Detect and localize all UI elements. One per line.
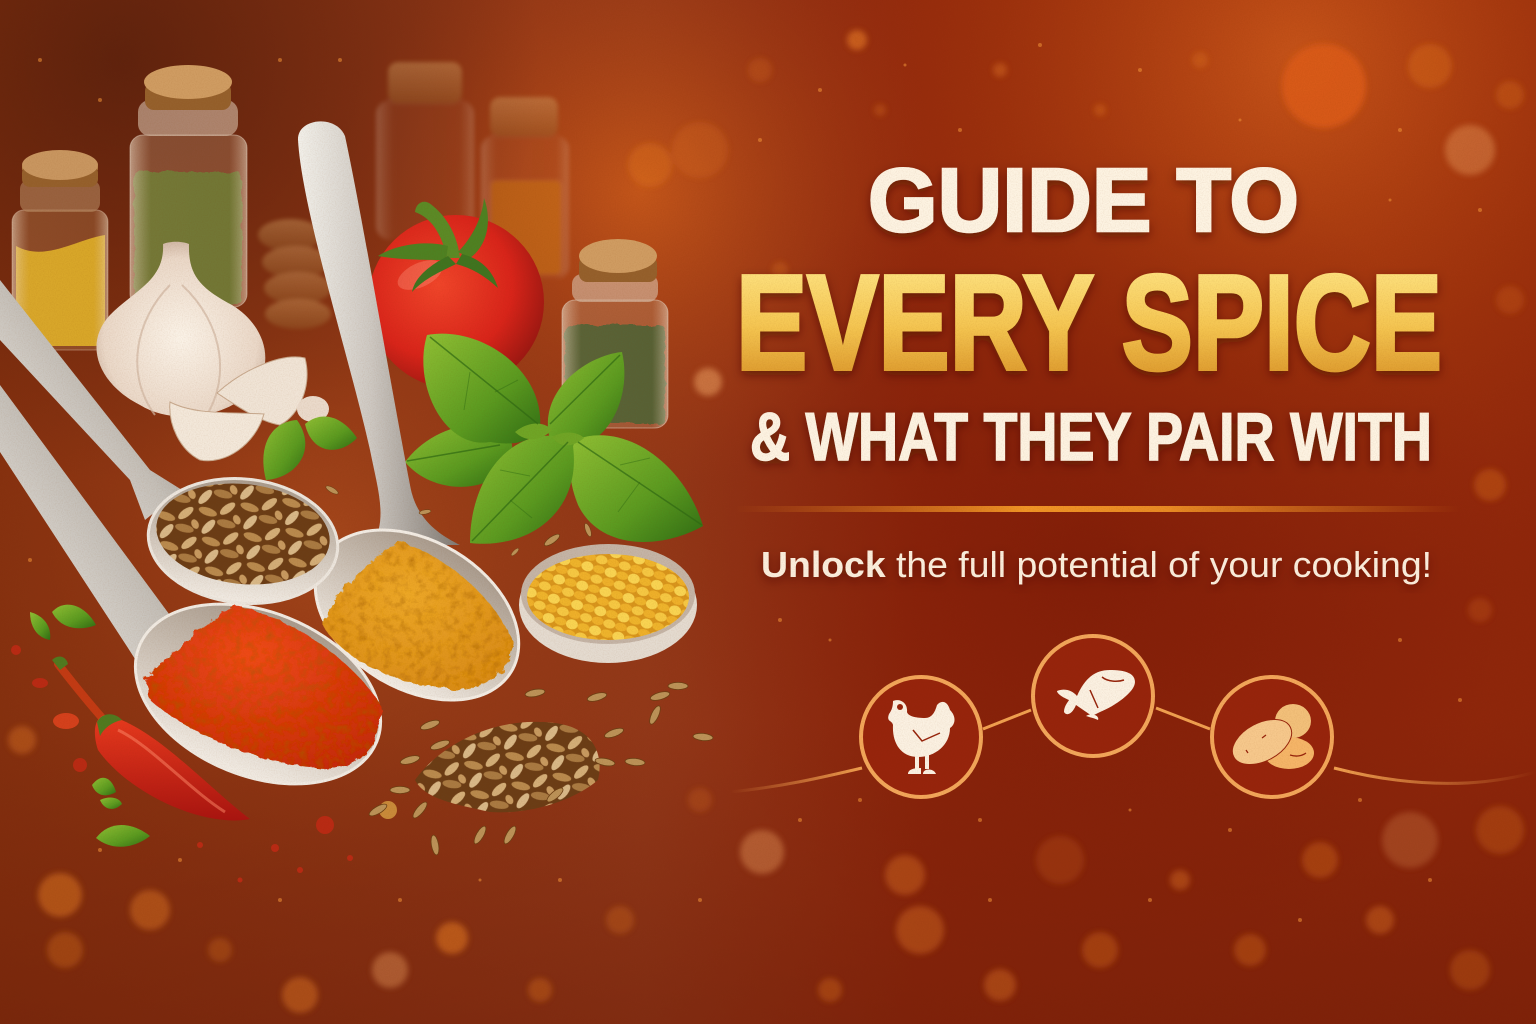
divider: [735, 506, 1460, 512]
red chili: [52, 657, 250, 820]
icon: potatoes: [1212, 677, 1332, 797]
connecting line: [730, 708, 1536, 792]
seed spoon: [0, 280, 344, 613]
jar: yellow spice: [12, 150, 108, 350]
tomato: [368, 198, 544, 389]
jar: small green herb: [562, 239, 668, 428]
scattered seeds: [325, 394, 713, 855]
red spice spoon: [0, 385, 407, 818]
icon: chicken: [861, 677, 981, 797]
title line 1: GUIDE TO: [868, 151, 1299, 251]
garlic cloves: [170, 357, 329, 461]
subtitle: Unlock the full potential of your cooking!: [761, 544, 1432, 585]
basil leaves: [405, 334, 703, 544]
faded background jars: [258, 62, 569, 329]
turmeric spoon: [285, 121, 549, 735]
red flakes: [11, 645, 397, 882]
small bowl of yellow seeds: [519, 544, 697, 663]
seed pile: [415, 722, 600, 812]
small basil sprig: [263, 417, 357, 480]
garlic bulb: [96, 242, 265, 418]
scattered leaves: [30, 605, 150, 847]
jar: green herb: [130, 65, 247, 307]
icon: fish: [1033, 636, 1153, 756]
